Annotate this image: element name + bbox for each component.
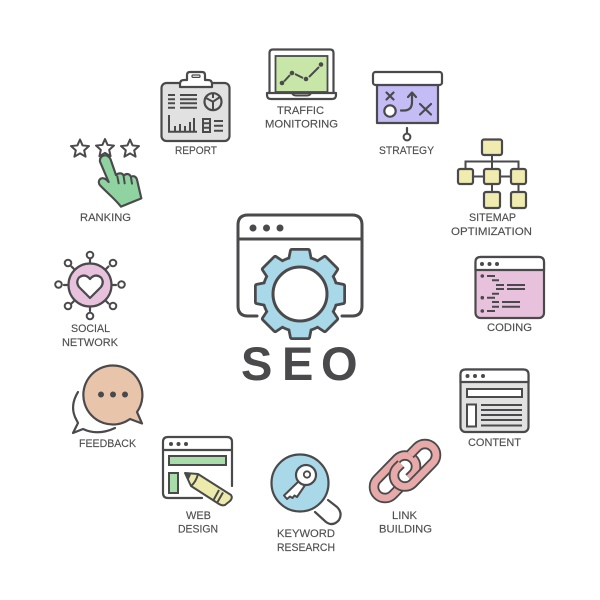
panel: report xyxy=(162,72,230,157)
icon: sitemap tree xyxy=(458,140,526,208)
panel: social network xyxy=(55,252,125,349)
icon: speech bubbles xyxy=(73,365,142,433)
icon: heart network xyxy=(55,252,125,319)
label: strategy: STRATEGY xyxy=(379,145,434,157)
label: social network: NETWORK xyxy=(62,337,119,349)
icon: gear xyxy=(257,251,343,337)
panel: coding xyxy=(476,257,544,334)
panel: feedback xyxy=(73,365,142,450)
label: ranking: RANKING xyxy=(80,212,131,224)
label: web design: WEB xyxy=(186,510,211,522)
icon: window with pencil xyxy=(163,437,232,505)
icon: content window xyxy=(460,370,528,432)
icon: browser window xyxy=(238,215,362,316)
label: keyword research: RESEARCH xyxy=(277,542,335,554)
label: link building: LINK xyxy=(392,510,418,522)
label: feedback: FEEDBACK xyxy=(79,438,136,450)
icon: code window xyxy=(476,257,544,318)
icon: presentation board xyxy=(373,72,442,140)
panel: keyword research xyxy=(272,454,341,554)
label: sitemap optimization: SITEMAP xyxy=(469,212,516,224)
label: report: REPORT xyxy=(175,145,217,157)
label: traffic monitoring: MONITORING xyxy=(265,118,338,130)
icon: clipboard report xyxy=(162,72,230,141)
label: sitemap optimization: OPTIMIZATION xyxy=(451,226,532,238)
panel: content xyxy=(460,370,528,449)
panel: strategy xyxy=(373,72,442,157)
label: social network: SOCIAL xyxy=(71,323,110,335)
panel: link building xyxy=(374,444,436,536)
label: keyword research: KEYWORD xyxy=(277,528,335,540)
title: SEO xyxy=(241,337,358,390)
panel: ranking xyxy=(71,139,141,224)
label: web design: DESIGN xyxy=(178,524,218,536)
panel: traffic monitoring xyxy=(265,50,338,130)
label: coding: CODING xyxy=(487,322,532,334)
panel: sitemap optimization xyxy=(451,140,532,238)
panel: web design xyxy=(163,437,232,536)
label: link building: BUILDING xyxy=(379,524,432,536)
icon: three stars and pointing hand xyxy=(71,139,141,207)
icon: laptop with line chart xyxy=(267,50,336,99)
label: traffic monitoring: TRAFFIC xyxy=(277,105,324,117)
icon: magnifier with key xyxy=(272,454,341,524)
label: content: CONTENT xyxy=(468,437,521,449)
panel: central SEO emblem xyxy=(238,215,362,390)
icon: chain links xyxy=(374,444,436,498)
